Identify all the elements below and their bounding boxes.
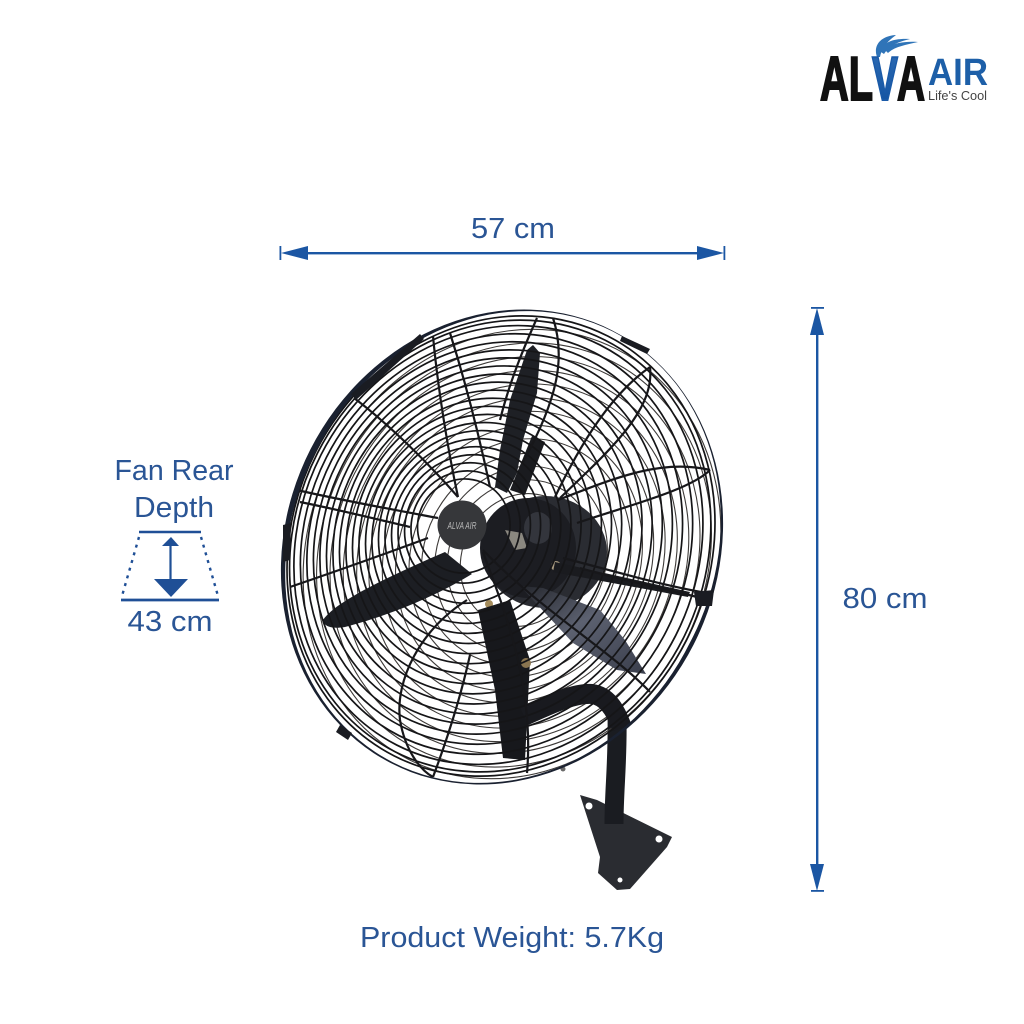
motor housing: [480, 436, 690, 608]
fan blade: lower left: [323, 552, 472, 628]
hub cap with brand: [438, 500, 486, 550]
depth heading: Fan Rear: [114, 455, 234, 487]
depth icon: [121, 532, 219, 600]
height arrow: [810, 307, 824, 892]
outer rim: [281, 309, 723, 785]
front grille rings: [286, 315, 716, 777]
height label: 80 cm: [842, 583, 928, 615]
rear grille: [302, 328, 721, 780]
fan blade: lower right: [520, 586, 646, 674]
width label: 57 cm: [471, 213, 555, 245]
width dimension: [280, 213, 725, 260]
mounting bracket: [478, 600, 622, 760]
logo wordmark ALVA: AL: [820, 45, 873, 114]
logo wordmark AIR: AIR: [928, 52, 988, 94]
logo tagline: Life's Cool: [928, 88, 987, 103]
depth heading: Depth: [134, 492, 214, 524]
hub cap with brand: ALVA AIR: [447, 521, 476, 532]
fan rear depth callout: [114, 455, 234, 638]
grille spokes: [290, 318, 710, 777]
wall plate and pole: [560, 715, 672, 890]
logo: Alva Air: [820, 35, 988, 114]
logo wordmark ALVA: A: [897, 45, 925, 114]
logo wordmark ALVA: V: [872, 45, 898, 114]
product weight: Product Weight: 5.7Kg: [360, 922, 664, 954]
rim clips: [283, 334, 714, 740]
logo swoosh: [876, 35, 918, 57]
depth value: 43 cm: [128, 606, 212, 638]
wall fan illustration: [280, 310, 724, 890]
height dimension: [810, 307, 928, 892]
width arrow: [280, 246, 725, 260]
depth heading: [114, 455, 234, 524]
fan blade: top: [495, 345, 540, 493]
